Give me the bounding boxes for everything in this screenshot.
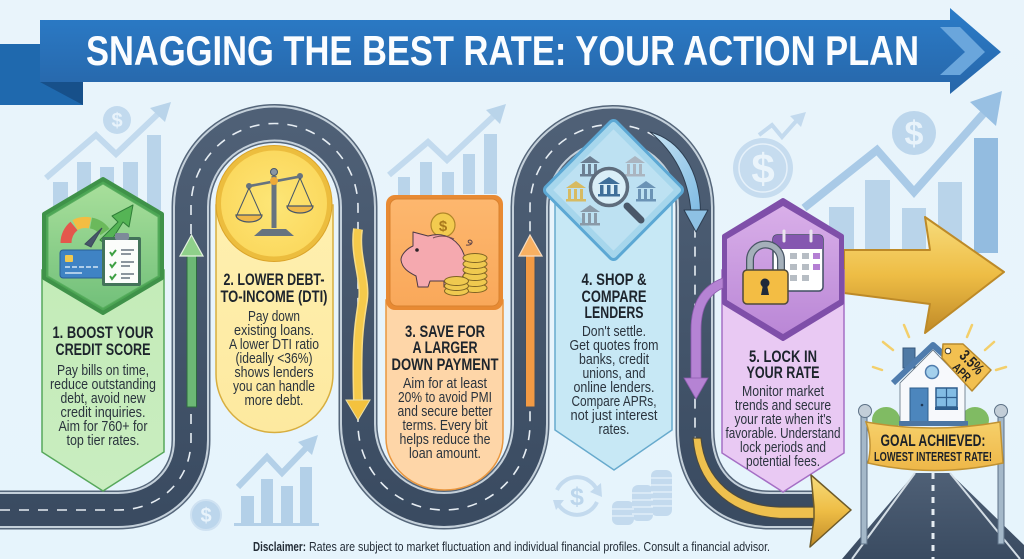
heading 1: CREDIT SCORE (56, 341, 150, 359)
body text 3: helps reduce the (400, 431, 490, 448)
body text 4: rates. (598, 421, 630, 438)
background cycle icon with coin stacks (553, 470, 672, 525)
panel 1 hexagon header (44, 179, 162, 313)
background coin: bottom left: $ (200, 505, 212, 527)
heading 4: 4. SHOP & (582, 271, 647, 289)
icon: balance scale (236, 168, 313, 236)
body text 4: Get quotes from (570, 337, 658, 354)
heading 3: 3. SAVE FOR (405, 323, 485, 341)
body text 2: A lower DTI ratio (229, 336, 319, 353)
body text 2: more debt. (244, 392, 304, 409)
arrow: yellow wavy down (346, 229, 370, 420)
panel 2 circle header (216, 146, 332, 262)
price tag 3.5% APR (942, 344, 991, 391)
panel 4 body (555, 200, 672, 470)
road (0, 124, 820, 510)
body text 1: reduce outstanding (50, 376, 156, 393)
body text 1: debt, avoid new (60, 390, 146, 407)
body text 3: terms. Every bit (402, 417, 488, 434)
panel 5 body (722, 270, 844, 492)
panel 1 body (42, 270, 164, 491)
body text 4: Compare APRs, (572, 393, 656, 410)
body text 1: Pay bills on time, (57, 362, 149, 379)
big gold arrow (844, 217, 1004, 333)
icon: piggy bank with coins (401, 213, 487, 296)
icon: banks under magnifier (566, 156, 656, 226)
background chart: top right (804, 91, 1002, 258)
heading 5: 5. LOCK IN (749, 348, 817, 366)
background coin with small arrow: $ (751, 145, 775, 192)
body text 1: Aim for 760+ for (58, 418, 148, 435)
background coin: bottom left (191, 500, 221, 530)
heading 3: DOWN PAYMENT (392, 356, 498, 374)
heading 3 (392, 323, 498, 374)
body text 5: your rate when it's (734, 411, 832, 428)
background coin with small arrow (733, 112, 806, 198)
body text 2: Pay down (248, 308, 300, 325)
heading 2: TO-INCOME (DTI) (220, 288, 328, 306)
body text 3: and secure better (398, 403, 492, 420)
background chart: top left (46, 102, 171, 222)
heading 4: COMPARE (582, 288, 646, 306)
background chart: top middle (389, 104, 506, 197)
body text 5: favorable. Understand (726, 425, 840, 442)
title banner (0, 8, 1001, 105)
icon: padlock and calendar (743, 231, 823, 304)
panel: step 2 lower DTI (216, 146, 333, 433)
heading 3: A LARGER (412, 339, 478, 357)
body text 5: potential fees. (746, 453, 820, 470)
background chart: top right: $ (905, 115, 924, 153)
heading 1: 1. BOOST YOUR (52, 324, 154, 342)
panel 5 hexagon header (724, 200, 842, 339)
body text 2: existing loans. (234, 322, 314, 339)
background cycle icon with coin stacks: $ (570, 483, 584, 511)
body text 3: 20% to avoid PMI (398, 389, 492, 406)
body text 5 (726, 383, 840, 470)
price tag 3.5% APR: APR (950, 360, 974, 384)
arrow: purple curved down (684, 278, 723, 399)
heading 1 (52, 324, 154, 359)
body text 3: Aim for at least (403, 375, 488, 392)
body text 3: loan amount. (409, 445, 481, 462)
light rays (873, 325, 1006, 370)
body text 5: Monitor market (742, 383, 825, 400)
body text 1: credit inquiries. (60, 404, 146, 421)
panel: step 3 down payment (386, 195, 503, 490)
arrow: green up (180, 235, 203, 407)
body text 3 (398, 375, 492, 462)
body text 2 (229, 308, 319, 409)
body text 1: top tier rates. (66, 432, 140, 449)
body text 2: you can handle (233, 378, 315, 395)
body text 5: trends and secure (735, 397, 831, 414)
arrow: gold curved right (693, 438, 851, 547)
banner tail (0, 44, 83, 105)
goal banner text (874, 431, 992, 464)
background chart: bottom (234, 435, 319, 526)
heading 2: 2. LOWER DEBT- (224, 271, 324, 289)
arrow: orange up (519, 235, 542, 407)
icon: gauge, card and checklist (60, 205, 141, 286)
arrow: blue curved down (650, 132, 708, 232)
heading 5: YOUR RATE (746, 364, 820, 382)
body text 4: online lenders. (574, 379, 654, 396)
goal banner text: GOAL ACHIEVED: (880, 431, 986, 450)
goal: road to horizon (842, 473, 1024, 559)
panel: step 1 boost credit score (42, 179, 164, 491)
goal banner (866, 422, 1003, 470)
heading 2 (220, 271, 328, 306)
price tag 3.5% APR: 3.5% (956, 347, 987, 378)
background chart: top left: $ (111, 110, 123, 132)
panel: step 4 shop and compare (549, 125, 678, 470)
disclaimer: Rates are subject to market fluctuation and individual financial profiles. Consult a financial advisor. (309, 539, 770, 554)
banner chevron (940, 27, 985, 75)
panel 3 body (386, 300, 503, 490)
heading 4: LENDERS (584, 304, 644, 322)
panel 4 diamond header (549, 125, 678, 255)
body text 2: (ideally <36%) (236, 350, 312, 367)
body text 4: Don't settle. (582, 323, 646, 340)
banner arrow body (40, 8, 1001, 94)
icon: house with price tag (872, 325, 1006, 433)
banner fold (40, 82, 83, 105)
body text 5: lock periods and (740, 439, 826, 456)
body text 4: banks, credit (579, 351, 650, 368)
body text 4 (570, 323, 658, 438)
icon: piggy bank with coins: $ (439, 218, 448, 235)
heading 5 (746, 348, 820, 382)
panel 2 body (216, 205, 333, 433)
body text 1 (50, 362, 156, 449)
panel 3 square header (386, 195, 503, 310)
disclaimer: Disclaimer: (253, 539, 306, 554)
heading 4 (582, 271, 647, 322)
goal banner posts (858, 404, 1008, 544)
panel: step 5 lock in rate (722, 200, 844, 492)
body text 2: shows lenders (234, 364, 314, 381)
body text 4: unions, and (582, 365, 646, 382)
body text 4: not just interest (570, 407, 658, 424)
